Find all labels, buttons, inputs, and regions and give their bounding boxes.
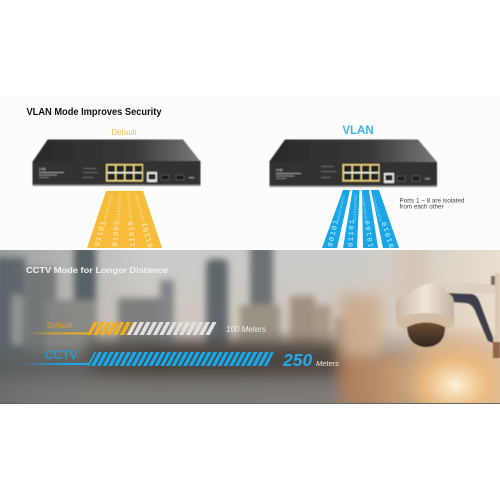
heading: CCTV Mode for Longer Distance: CCTV Mode for Longer Distance [26,265,168,275]
switch: default [32,140,200,186]
bar: CCTV 250 meters: CCTV [45,348,78,362]
label: Default: Default [111,128,137,137]
photo: blurred city skyline [0,240,500,447]
icon: dome security camera [396,273,500,358]
bar: default 100 meters: Default [47,321,73,330]
heading: VLAN Mode Improves Security: VLAN Mode Improves Security [26,107,162,118]
data beam: default: 1001011010 [128,192,134,221]
bar: CCTV 250 meters: 250 [282,350,312,370]
callout: ports isolated: Ports 1 ~ 8 are isolated [400,198,465,204]
callout: ports isolated: from each other [400,204,444,210]
data beams: VLAN isolated ports [322,190,399,249]
data beams: VLAN isolated ports: 0010100011 [337,195,347,221]
bar: default 100 meters [25,321,266,335]
data beam: default: 0100101011 [117,192,123,221]
data beam: default: 11010 [128,220,138,247]
data beams: VLAN isolated ports: 00101 [327,220,341,248]
data beams: VLAN isolated ports: 10100 [364,220,376,248]
switch: default: cudy [39,167,46,171]
data beam: default: 01001 [112,220,122,247]
switch: VLAN [269,140,437,187]
bar: CCTV 250 meters: Meters [316,359,339,368]
data beams: VLAN isolated ports: 0101001011 [372,196,384,222]
data beam: default [87,191,162,248]
data beam: default: 0010110101 [135,193,147,222]
data beams: VLAN isolated ports: 0110100101 [354,195,359,221]
switch: VLAN: cudy [276,168,283,172]
data beam: default: 0010110101 [104,193,115,222]
data beam: default: 01101 [94,220,109,248]
bar: CCTV 250 meters [20,348,339,370]
label: VLAN: VLAN [342,125,374,137]
data beam: default: 01101 [141,221,156,248]
bar: default 100 meters: 100 Meters [226,325,266,334]
data beams: VLAN isolated ports: 01010 [381,220,397,249]
data beams: VLAN isolated ports: 01101 [348,220,357,247]
data beams: VLAN isolated ports: 1010010011 [362,195,369,221]
